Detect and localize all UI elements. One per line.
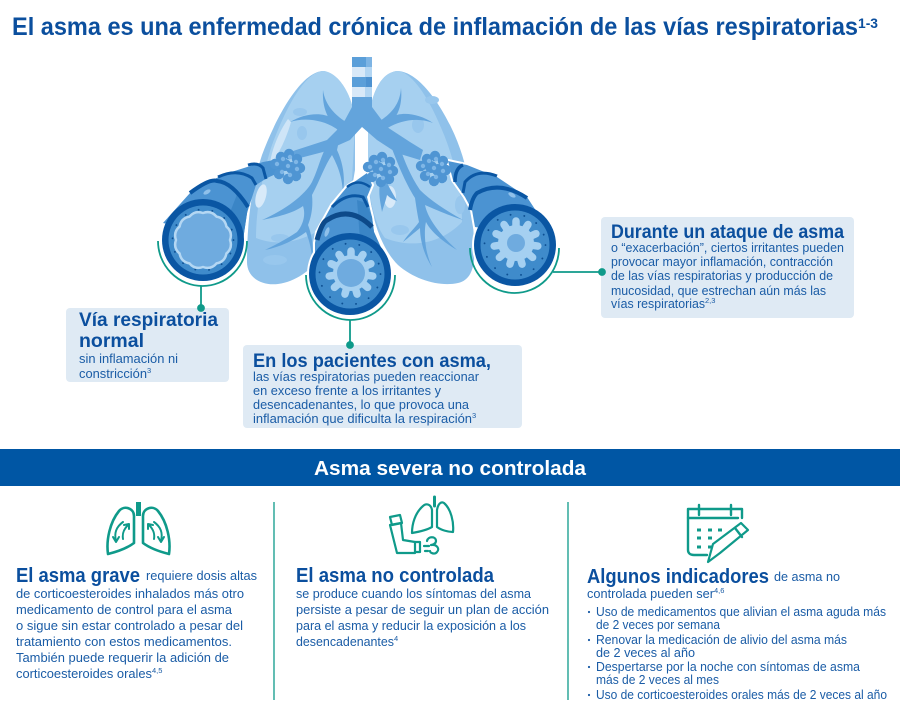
column: indicators: más de 2 veces al mes [596, 672, 719, 687]
banner: Asma severa no controlada [314, 457, 587, 480]
callout: asthma attack: Durante un ataque de asma [611, 222, 844, 243]
column: severe asthma [16, 565, 257, 681]
title: El asma es una enfermedad crónica de inflamación de las vías respiratorias [12, 13, 858, 41]
title: 1-3 [858, 15, 878, 31]
column: indicators: de 2 veces al año [596, 645, 695, 660]
column: indicators: Algunos indicadores [587, 566, 769, 588]
callout: normal airway: constricción [79, 366, 147, 381]
trachea and bronchi [262, 88, 463, 267]
column: severe asthma: de corticoesteroides inhalados más otro [16, 586, 244, 601]
wavy airway wall [175, 212, 231, 268]
connector: normal [158, 241, 247, 311]
callout: asthma attack: de las vías respiratorias y producción de [611, 268, 833, 283]
lung blotches [263, 96, 465, 265]
alveoli clusters [270, 149, 451, 187]
connector: asthma [306, 275, 395, 348]
icon: lungs with arrows [107, 502, 170, 554]
callout: asthma patients: 3 [472, 411, 476, 420]
column: severe asthma: medicamento de control para el asma [16, 602, 233, 617]
column: indicators: de asma no [774, 569, 840, 584]
callout: asthma attack: vías respiratorias [611, 296, 705, 311]
column: uncontrolled asthma: para el asma y reducir la exposición a los [296, 618, 526, 633]
column: uncontrolled asthma: se produce cuando los síntomas del asma [296, 586, 532, 601]
left lung [247, 71, 355, 284]
banner [0, 449, 900, 486]
lung highlights [270, 119, 291, 163]
column: indicators: Renovar la medicación de alivio del asma más [596, 632, 847, 647]
column: severe asthma: requiere dosis altas [146, 568, 257, 583]
column: indicators [587, 566, 887, 702]
column: uncontrolled asthma: persiste a pesar de seguir un plan de acción [296, 602, 549, 617]
callout: asthma attack: o “exacerbación”, ciertos irritantes pueden [611, 240, 844, 255]
callout: normal airway: normal [79, 331, 144, 352]
callout: normal airway: 3 [147, 366, 151, 375]
icon: inhaler and lungs [390, 497, 453, 554]
airway: asthma [307, 173, 393, 317]
icon: calendar and pencil [688, 505, 748, 562]
callout: asthma patients [243, 345, 522, 428]
column: severe asthma: El asma grave [16, 565, 140, 587]
column: uncontrolled asthma: desencadenantes [296, 634, 394, 649]
callout: asthma patients: en exceso frente a los irritantes y [253, 383, 441, 398]
column: indicators: controlada pueden ser [587, 586, 715, 601]
column: uncontrolled asthma [296, 565, 549, 649]
connector: attack [470, 248, 605, 293]
trachea rings [352, 57, 372, 67]
callout: asthma attack: provocar mayor inflamación, contracción [611, 254, 833, 269]
callout: normal airway: Vía respiratoria [79, 310, 218, 331]
column: severe asthma: tratamiento con estos medicamentos. [16, 634, 232, 649]
column: indicators: 4,6 [714, 586, 724, 595]
airway: normal [160, 158, 285, 282]
column: indicators: Despertarse por la noche con síntomas de asma [596, 659, 861, 674]
callout: asthma attack: 2,3 [705, 296, 715, 305]
column: severe asthma: o sigue sin estar controlado a pesar del [16, 618, 243, 633]
callout: asthma attack [601, 217, 854, 318]
airway: asthma attack [448, 161, 558, 288]
callout: asthma attack: mucosidad, que estrechan aún más las [611, 283, 826, 298]
callout: asthma patients: inflamación que dificulta la respiración [253, 411, 472, 426]
column: indicators: Uso de medicamentos que alivian el asma aguda más [596, 604, 886, 619]
column: severe asthma: corticoesteroides orales [16, 666, 152, 681]
lungs illustration [247, 57, 474, 284]
column: severe asthma: 4,5 [152, 666, 162, 675]
callout: asthma patients: En los pacientes con asma, [253, 351, 491, 372]
callout: normal airway: sin inflamación ni [79, 351, 178, 366]
callout: asthma patients: las vías respiratorias pueden reaccionar [253, 369, 480, 384]
callout: normal airway [66, 308, 229, 382]
callout: asthma patients: desencadenantes, lo que provoca una [253, 397, 470, 412]
column: indicators: de 2 veces por semana [596, 617, 721, 632]
column: uncontrolled asthma: El asma no controlada [296, 565, 495, 587]
right lung [368, 71, 474, 284]
column: uncontrolled asthma: 4 [394, 634, 398, 643]
column: severe asthma: También puede requerir la adición de [16, 650, 229, 665]
